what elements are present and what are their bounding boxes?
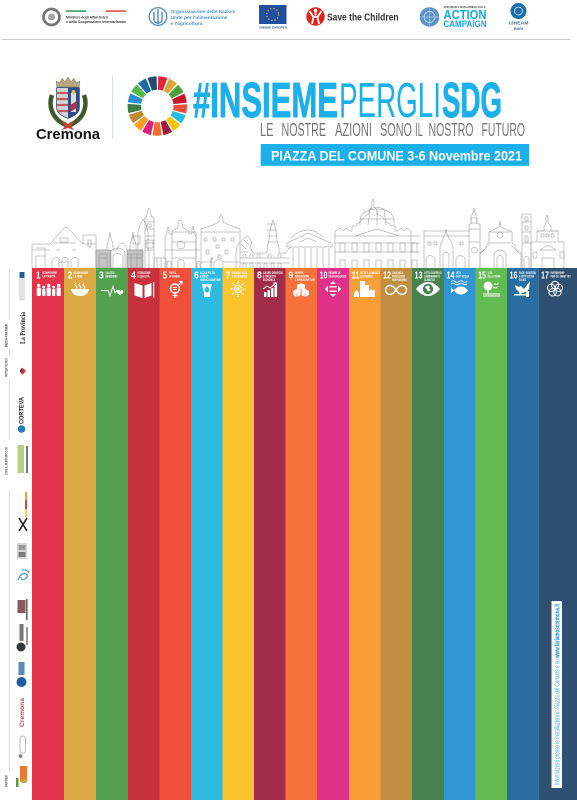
subtitle: NOSTRE [282,120,326,140]
column 9: industry and innovation: IMPRESE, [295,271,304,275]
logo: Cremona red: Cremona [20,697,26,727]
logo: Save the Children: Save the Children [327,12,398,24]
column 16: peace and justice: SOLIDE [519,278,526,282]
icon: water glass [202,284,212,297]
logo: blue circle sponsor [16,662,26,687]
logo: FAO: Unite per l'alimentazione [170,15,228,21]
title: PERGLI [339,74,441,128]
column 5: gender equality: PARITÀ [169,270,176,275]
column 2: zero hunger [64,268,96,800]
column 13: climate action: CAMBIAMENTO [424,274,440,278]
logo: colourful sponsor [19,492,27,531]
icon: infinity [386,286,406,294]
logo: dark circle sponsor [16,624,28,652]
logo: CIHEAM Bari: BARI [514,27,523,31]
column 2: zero hunger: LA FAME [74,274,83,278]
label: media partner: MEDIA PARTNER [4,323,8,347]
column 15: life on land: SULLA TERRA [488,274,501,278]
column 15: life on land: VITA [488,271,493,275]
column 11: sustainable cities: CITTÀ E COMUNITÀ [360,270,380,275]
column 4: quality education: ISTRUZIONE [138,271,151,275]
logo: Ministero degli Affari Esteri: Ministero degli Affari Esteri [66,16,108,20]
logo: Ministero degli Affari Esteri: e della Cooperazione Internazionale [66,20,126,24]
column 10: reduced inequalities: RIDURRE LE [328,271,341,275]
column 17: partnerships [539,268,577,800]
logo: grey stamp [17,543,27,559]
column 6: clean water: E SERVIZI [200,274,208,278]
column 3: good health: BENESSERE [106,274,118,278]
label: partner tecnico: PARTNER TECNICO [4,358,8,377]
column 8: decent work [254,268,286,800]
text: Cremona: Cremona [36,126,101,143]
logo: technical partner [20,368,26,375]
column 13: climate action: 13 [414,270,423,281]
column 16: peace and justice: 16 [510,270,518,281]
logo: La Provincia: La Provincia [18,312,27,344]
laurel wreath [51,95,85,125]
logo: Corteva [18,396,26,433]
icon: cubes [293,283,309,297]
column 6: clean water: ACQUA PULITA [200,271,215,275]
logo: Unione Europea flag [259,5,288,30]
column 4: quality education: DI QUALITÀ [138,273,150,278]
column 15: life on land: 15 [478,270,486,281]
column 3: good health: SALUTE E [106,271,115,275]
logo: UN SDG Action Campaign [420,6,487,30]
icon: tree and birds [483,282,500,296]
column 5: gender equality: 5 [162,270,168,281]
column 5: gender equality: DI GENERE [169,274,180,278]
logo: Corteva: CORTEVA [20,396,26,424]
column 6: clean water: IGIENICO-SANITARI [200,278,220,282]
column 1: no poverty: LA POVERTÀ [42,273,55,278]
column 13: climate action: LOTTA CONTRO IL [424,271,442,275]
logo: UN SDG Action Campaign: ACTION [444,7,486,22]
logo: UN SDG Action Campaign: SUSTAINABLE DEVELOPMENT GOALS [444,6,486,9]
column 9: industry and innovation: E INFRASTRUTTURE [295,278,315,282]
icon: eye with globe [416,282,440,296]
column 1: no poverty: SCONFIGGERE [42,271,57,275]
logo: Cremona coat of arms [36,77,101,143]
column 12: responsible consumption: 12 [383,270,391,281]
column 4: quality education: 4 [131,270,136,281]
column 15: life on land [476,268,507,800]
icon: heartbeat [101,286,123,296]
date banner: PIAZZA DEL COMUNE 3-6 Novembre 2021 [271,147,522,163]
column 11: sustainable cities [349,268,380,800]
column 12: responsible consumption: RESPONSABILI [392,278,407,282]
skyline of monuments [32,199,564,268]
column 6: clean water [191,268,222,800]
logo: LGSS green [18,445,28,473]
column 5: gender equality [160,268,191,800]
column 13: climate action [412,268,444,800]
subtitle: NOSTRO [428,120,474,140]
column 8: decent work: 8 [257,270,262,281]
column 14: life below water [444,268,476,800]
icon: fish and waves [451,281,468,294]
label: partner: PARTNER [4,774,8,787]
column 12: responsible consumption: CONSUMO E [392,271,403,275]
column 14: life below water: 14 [446,270,455,281]
ribbon [61,120,75,130]
column 7: clean energy: 7 [226,270,231,281]
icon: book [134,282,154,298]
column 2: zero hunger: 2 [68,270,73,281]
shield [56,88,80,118]
crown [56,77,80,87]
logo: orange box [16,766,27,787]
column 6: clean water: 6 [194,270,199,281]
column 14: life below water: SOTT'ACQUA [456,274,469,278]
SDG colour columns [32,268,577,800]
icon: bowl [71,283,89,296]
column 16: peace and justice: E ISTITUZIONI [519,274,534,278]
column 7: clean energy: E ACCESSIBILE [232,274,247,278]
logo: CIHEAM Bari: CIHEAM [508,20,529,26]
column 1: no poverty: 1 [36,270,41,281]
column 3: good health [96,268,128,800]
column 12: responsible consumption [380,268,412,800]
logo: Ministero degli Affari Esteri [44,9,126,25]
logo: grey arc [19,736,26,758]
column 3: good health: 3 [99,270,104,281]
logo: FAO: e l'agricoltura [170,21,203,27]
logo: Museo [18,599,28,620]
column 7: clean energy: ENERGIA PULITA [232,271,247,275]
icon: growth chart [263,283,277,297]
column 11: sustainable cities: 11 [352,270,360,281]
icon: partnership rings [548,281,562,296]
subtitle: FUTURO [482,120,525,140]
left partner strip [4,269,29,787]
icon: family [37,284,61,296]
column 17: partnerships: PARTNERSHIP [550,271,565,275]
title: SDG [442,74,502,128]
column 12: responsible consumption: PRODUZIONE [392,274,405,278]
column 8: decent work: LAVORO DIGNITOSO [263,271,283,275]
icon: inequality arrows [325,281,341,297]
vertical information note [552,601,562,788]
header logo strip [44,3,529,31]
column 11: sustainable cities: SOSTENIBILI [360,274,373,278]
column 9: industry and innovation [286,268,317,800]
logo: FAO: Organizzazione delle Nazioni [170,9,236,15]
SDG wheel [125,73,190,139]
date banner [261,144,529,166]
column 14: life below water: VITA [456,271,461,275]
logo: blue swirl [18,570,29,580]
label: con il supporto di: CON IL SUPPORTO DI [4,447,8,475]
vertical information note: Informazioni presso le Installazioni in Piazza del Comune e su www.fariamoscremona.it [554,604,562,785]
icon: dove and gavel [514,281,530,297]
title: #INSIEME [193,74,338,128]
column 9: industry and innovation: 9 [288,270,294,281]
column 16: peace and justice [507,268,539,800]
column 2: zero hunger: SCONFIGGERE [74,271,88,275]
logo: newspaper box [20,272,24,300]
subtitle: SONO [380,120,412,140]
column 8: decent work: ECONOMICA [263,278,275,282]
logo: UN SDG Action Campaign: CAMPAIGN [444,19,487,30]
column 7: clean energy [222,268,254,800]
column 9: industry and innovation: INNOVAZIONE [295,274,309,278]
icon: gender [170,282,182,298]
subtitle: AZIONI [335,120,372,140]
column 8: decent work: E CRESCITA [263,274,276,278]
column 16: peace and justice: PACE, GIUSTIZIA [519,271,536,275]
logo: FAO [149,8,236,27]
logo: CIHEAM Bari [508,3,529,31]
column 17: partnerships: 17 [541,270,549,281]
subtitle [260,120,525,140]
icon: sun [230,281,246,297]
column 10: reduced inequalities [317,268,349,800]
column 4: quality education [128,268,160,800]
subtitle: LE [260,120,274,140]
column 1: no poverty [32,268,64,800]
column 10: reduced inequalities: DISUGUAGLIANZE [328,274,347,278]
logo: Save the Children [306,7,398,26]
column 13: climate action: CLIMATICO [424,278,435,282]
subtitle: IL [415,120,423,140]
logo: Unione Europea flag: UNIONE EUROPEA [259,26,288,30]
column 10: reduced inequalities: 10 [320,270,328,281]
icon: city [354,281,375,297]
